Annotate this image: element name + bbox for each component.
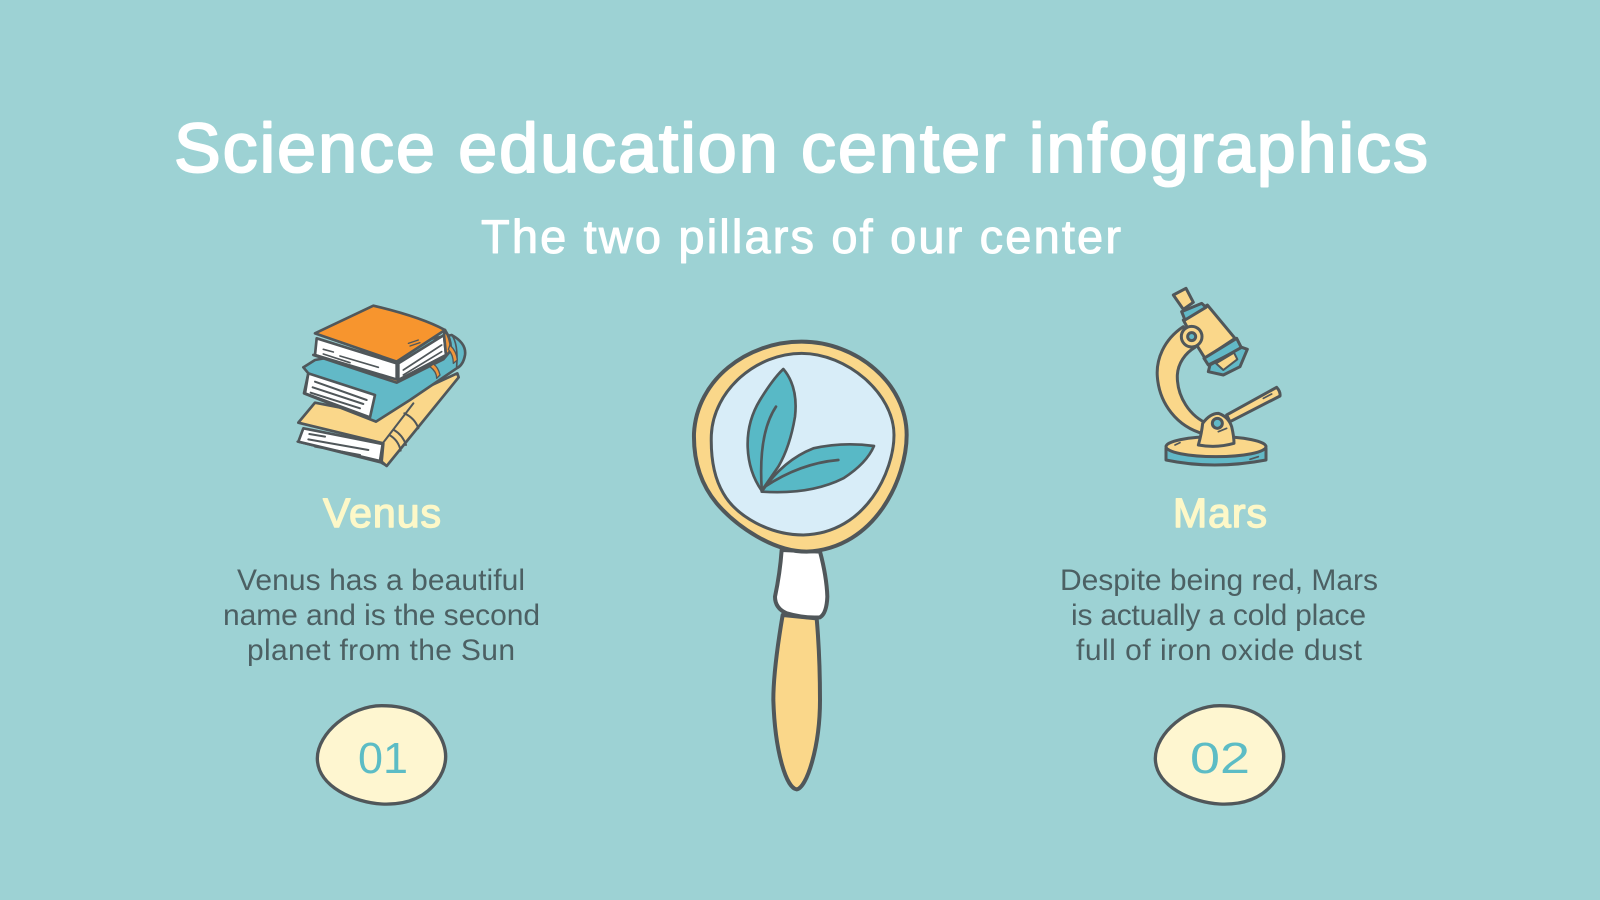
text block: Venus description: Venus has a beautiful	[237, 564, 525, 597]
magnifier handle	[773, 550, 827, 789]
text block: Mars description: is actually a cold place	[1071, 599, 1366, 632]
icon: stack of books	[297, 306, 465, 466]
subtitle: The two pillars of our center	[481, 210, 1121, 263]
text block: Venus description: planet from the Sun	[247, 634, 515, 667]
badge: 01	[317, 706, 446, 804]
title: Science education center infographics	[174, 109, 1428, 187]
text block: Mars description: Despite being red, Mars	[1060, 564, 1378, 597]
text block: Mars description	[1060, 564, 1378, 667]
badge: 02	[1155, 706, 1284, 804]
icon: magnifying glass with leaves	[694, 342, 907, 789]
text block: Venus description	[223, 564, 540, 667]
leaves	[748, 369, 874, 492]
panel: Venus	[223, 306, 540, 804]
panel: Mars	[1060, 288, 1378, 804]
text block: Venus description: name and is the second	[223, 599, 540, 632]
magnifier lens	[694, 342, 907, 552]
heading: Venus: Venus	[323, 490, 441, 536]
badge: 02: 02	[1190, 734, 1250, 783]
heading: Mars: Mars	[1173, 490, 1267, 536]
badge: 01: 01	[358, 734, 408, 783]
icon: microscope	[1157, 288, 1280, 465]
text block: Mars description: full of iron oxide dust	[1076, 634, 1363, 667]
